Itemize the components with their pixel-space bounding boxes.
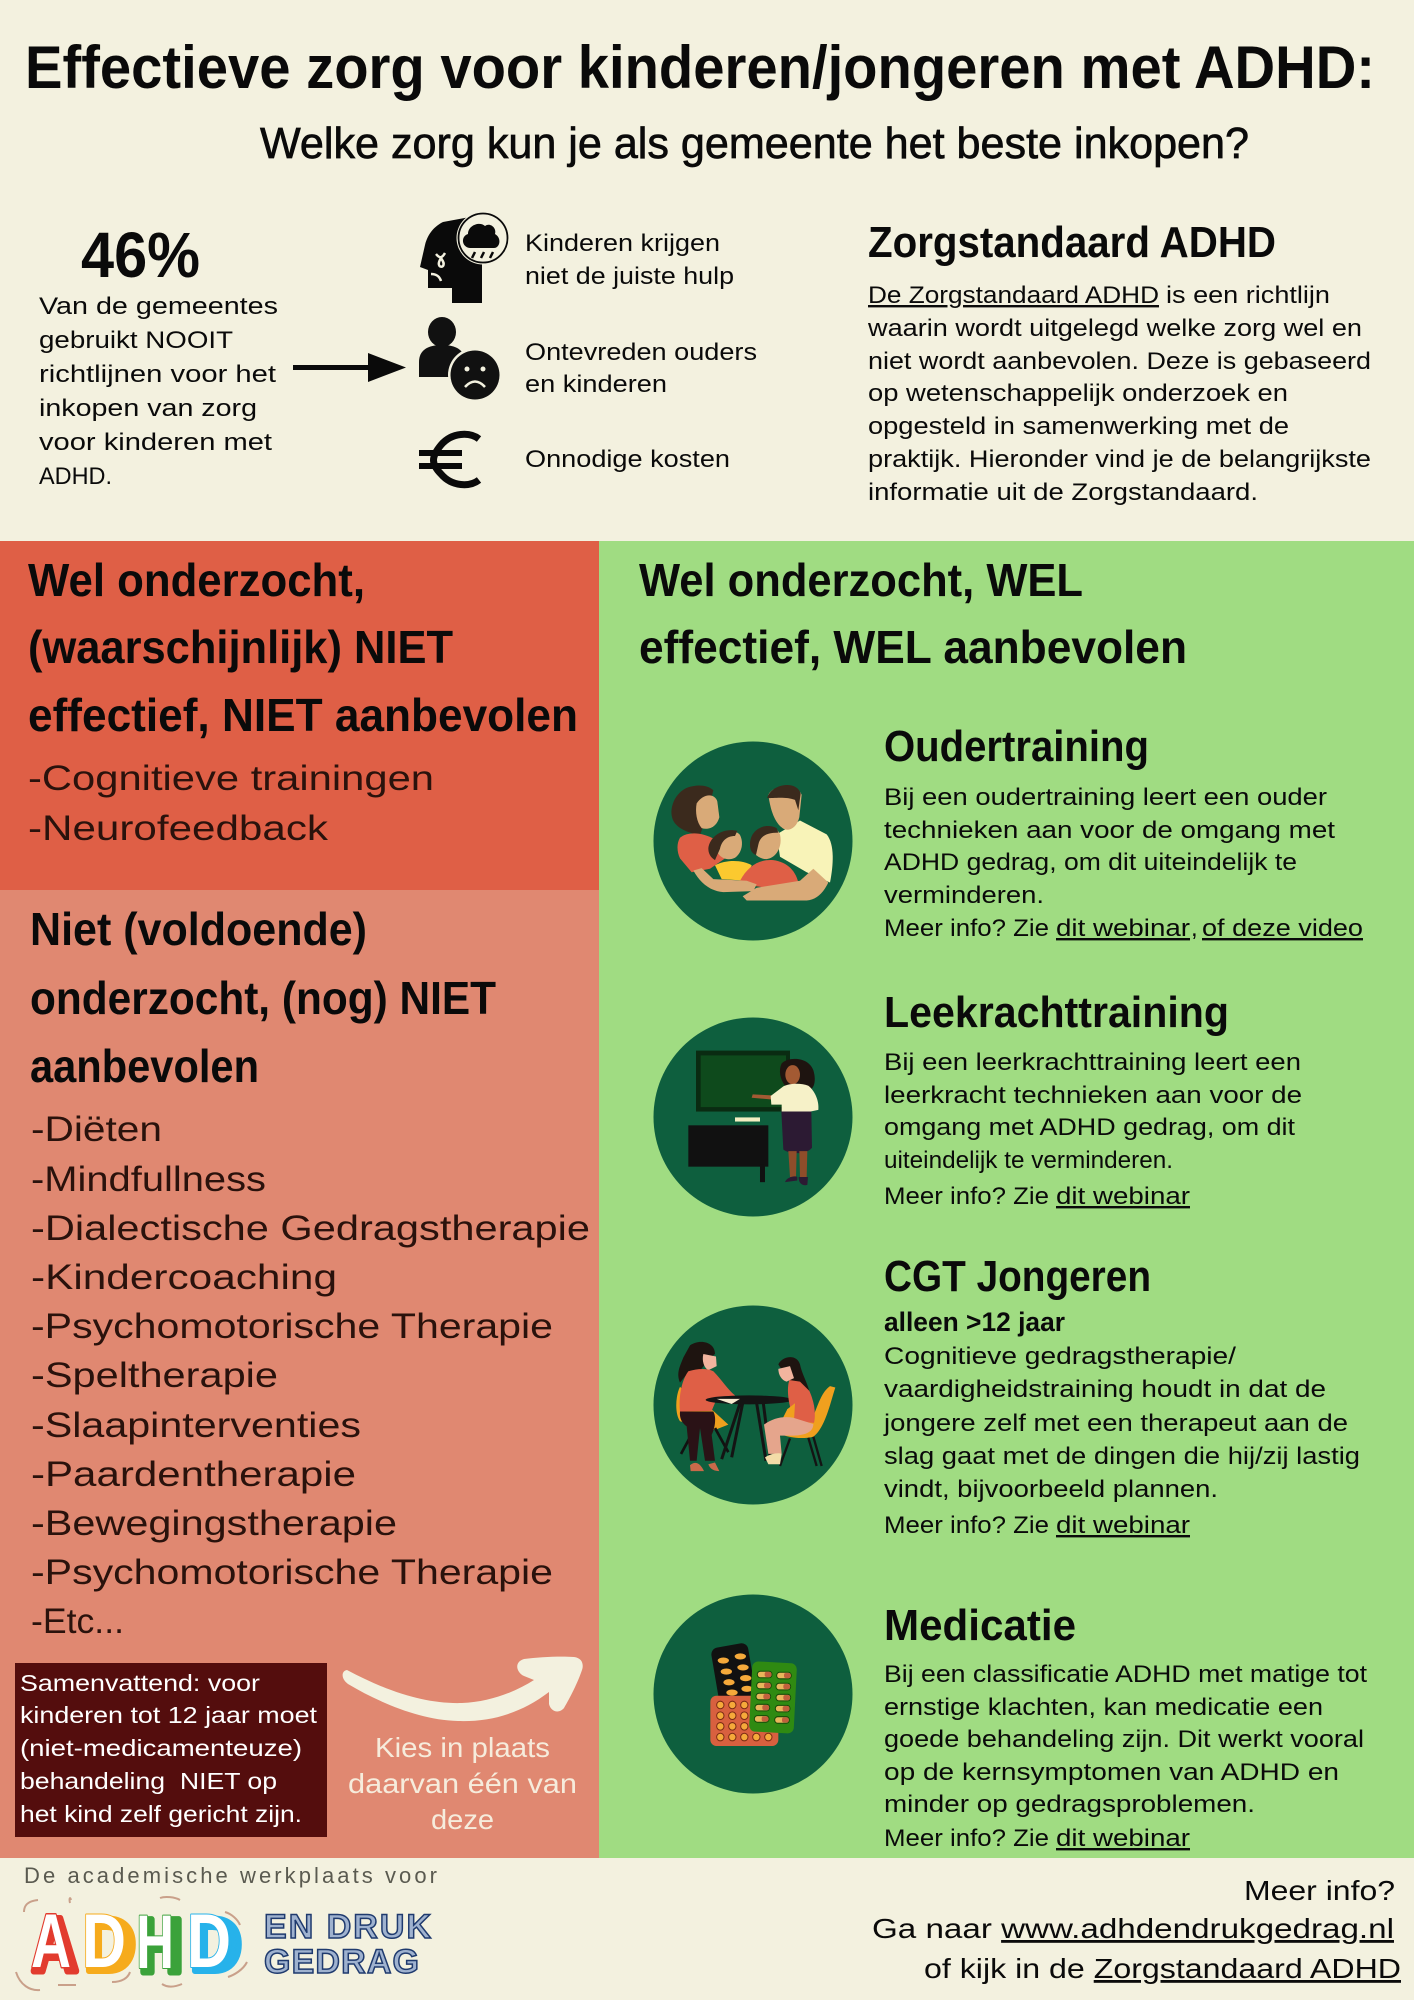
callout: choose instead: Kies in plaats [375, 1732, 550, 1763]
paragraph: waarin wordt uitgelegd welke zorg wel en [867, 315, 1362, 342]
description: Bij een classificatie ADHD met matige tot [884, 1661, 1367, 1688]
description: op de kernsymptomen van ADHD en [884, 1759, 1339, 1786]
description: of deze video [1202, 915, 1363, 942]
text block: Zorgstandaard ADHD [867, 218, 1371, 506]
statistic description: ADHD. [39, 463, 112, 490]
icon: therapist and adolescent at table [654, 1306, 852, 1504]
description: , [1191, 915, 1198, 942]
paragraph: is een richtlijn [1166, 282, 1330, 309]
consequences list [419, 212, 757, 485]
list of interventions [28, 759, 434, 848]
logo: ADHD letters: A [32, 1903, 78, 1988]
description [884, 1049, 1302, 1210]
label: dissatisfied: en kinderen [525, 371, 667, 398]
list of interventions: -Psychomotorische Therapie [31, 1307, 553, 1346]
description: goede behandeling zijn. Dit werkt vooral [884, 1726, 1364, 1753]
panel heading: effectief, NIET aanbevolen [28, 689, 578, 741]
paragraph [867, 282, 1371, 506]
paragraph: praktijk. Hieronder vind je de belangrijkste [868, 446, 1371, 473]
description [884, 1661, 1367, 1852]
panel heading: Wel onderzocht, WEL [639, 554, 1083, 606]
description: dit webinar [1056, 915, 1190, 942]
organisation tagline: De academische werkplaats voor [24, 1863, 437, 1888]
description: jongere zelf met een therapeut aan de [883, 1410, 1348, 1437]
description: vaardigheidstraining houdt in dat de [884, 1376, 1326, 1403]
icon: medication blister packs [654, 1594, 852, 1794]
description: vindt, bijvoorbeeld plannen. [884, 1476, 1218, 1503]
logo: en druk gedrag wordmark: EN DRUK [264, 1908, 431, 1946]
heading: Oudertraining [884, 722, 1149, 771]
callout: summary: kinderen tot 12 jaar moet [20, 1702, 318, 1728]
list of interventions: -Cognitieve trainingen [28, 759, 434, 798]
list of interventions: -Dialectische Gedragstherapie [31, 1209, 590, 1248]
description: minder op gedragsproblemen. [884, 1791, 1255, 1818]
callout: choose instead: daarvan één van [348, 1768, 577, 1799]
text block: medication [884, 1601, 1367, 1852]
list of interventions: -Mindfullness [31, 1160, 266, 1199]
panel heading: aanbevolen [30, 1040, 259, 1092]
list of interventions: -Slaapinterventies [31, 1406, 361, 1445]
text block: CBT for adolescents [883, 1252, 1360, 1539]
logo: ADHD letters: H [136, 1900, 174, 1985]
callout: summary [15, 1663, 327, 1837]
label: dissatisfied [525, 339, 757, 398]
panel heading: onderzocht, (nog) NIET [30, 972, 496, 1024]
arrow: curved towards recommended care [343, 1657, 583, 1721]
logo: ADHD letters: A [31, 1899, 71, 1984]
logo: ADHD letters: H [139, 1904, 183, 1989]
list of interventions: -Diëten [31, 1110, 162, 1149]
list of interventions: -Bewegingstherapie [31, 1504, 397, 1543]
heading: Zorgstandaard ADHD [868, 218, 1276, 267]
description: Meer info? Zie [884, 1512, 1049, 1539]
text block: parent training [884, 722, 1363, 942]
footer: more information: of kijk in de Zorgstandaard ADHD [924, 1953, 1401, 1984]
footer: more information: Ga naar www.adhdendrukgedrag.nl [872, 1913, 1394, 1944]
callout: summary: behandeling NIET op [20, 1768, 277, 1794]
footer: more information [872, 1875, 1401, 1984]
subtitle: Welke zorg kun je als gemeente het beste inkopen? [260, 119, 1249, 168]
callout: summary: (niet-medicamenteuze) [20, 1735, 302, 1761]
list of interventions: -Etc... [31, 1602, 124, 1641]
panel: researched, not effective [0, 541, 599, 890]
statistic description [39, 293, 278, 490]
description: omgang met ADHD gedrag, om dit [884, 1114, 1295, 1141]
list of interventions [31, 1110, 590, 1641]
statistic description: inkopen van zorg [39, 395, 257, 422]
paragraph: op wetenschappelijk onderzoek en [868, 380, 1288, 407]
description: verminderen. [884, 882, 1044, 909]
icon: person with sad face [419, 317, 502, 402]
icon: euro sign [419, 434, 479, 485]
panel heading [30, 903, 496, 1092]
statistic description: gebruikt NOOIT [39, 327, 233, 354]
description: Meer info? Zie [884, 915, 1049, 942]
paragraph: informatie uit de Zorgstandaard. [868, 479, 1258, 506]
panel heading: effectief, WEL aanbevolen [639, 621, 1187, 673]
panel heading: (waarschijnlijk) NIET [28, 621, 453, 673]
list of interventions: -Psychomotorische Therapie [31, 1553, 553, 1592]
description: uiteindelijk te verminderen. [884, 1147, 1173, 1174]
statistic description: voor kinderen met [39, 429, 272, 456]
footer: organisation [16, 1863, 437, 1990]
big number: 46% [81, 219, 200, 291]
statistic description: richtlijnen voor het [39, 361, 276, 388]
logo: en druk gedrag wordmark [264, 1908, 431, 1981]
description: Cognitieve gedragstherapie/ [884, 1343, 1236, 1370]
description: Bij een oudertraining leert een ouder [884, 784, 1327, 811]
description: dit webinar [1056, 1825, 1190, 1852]
label: wrong help [525, 230, 734, 290]
description [883, 1343, 1360, 1539]
label: wrong help: niet de juiste hulp [525, 263, 734, 290]
description: ernstige klachten, kan medicatie een [884, 1694, 1323, 1721]
arrow: statistic to consequences [293, 353, 406, 382]
heading: Leekrachttraining [884, 988, 1229, 1037]
icon: sad head with rain cloud [420, 212, 510, 303]
panel heading: Wel onderzocht, [28, 554, 365, 606]
heading: CGT Jongeren [884, 1252, 1151, 1301]
age note: alleen >12 jaar [884, 1307, 1065, 1337]
description [884, 784, 1363, 942]
logo: ADHD letters: D [84, 1903, 136, 1988]
list of interventions: -Neurofeedback [28, 809, 329, 848]
label: unnecessary costs: Onnodige kosten [525, 446, 730, 473]
description: dit webinar [1056, 1512, 1190, 1539]
panel heading: Niet (voldoende) [30, 903, 367, 955]
callout: summary: Samenvattend: voor [20, 1670, 260, 1696]
description: technieken aan voor de omgang met [884, 817, 1335, 844]
logo: ADHD letters: D [187, 1899, 231, 1984]
icon: family illustration [654, 742, 852, 940]
description: ADHD gedrag, om dit uiteindelijk te [884, 849, 1297, 876]
logo: ADHD letters [16, 1897, 247, 1990]
list of interventions: -Speltherapie [31, 1356, 278, 1395]
description: leerkracht technieken aan voor de [884, 1082, 1302, 1109]
description: dit webinar [1056, 1183, 1190, 1210]
paragraph: niet wordt aanbevolen. Deze is gebaseerd [868, 348, 1371, 375]
description: Bij een leerkrachttraining leert een [884, 1049, 1301, 1076]
description: Meer info? Zie [884, 1183, 1049, 1210]
logo: ADHD letters: D [190, 1903, 242, 1988]
callout: summary: het kind zelf gericht zijn. [20, 1801, 302, 1827]
paragraph: opgesteld in samenwerking met de [868, 413, 1289, 440]
callout: choose instead [348, 1732, 577, 1835]
statistic description: Van de gemeentes [39, 293, 278, 320]
text block: teacher training [884, 988, 1302, 1210]
panel heading [639, 554, 1187, 673]
heading: Medicatie [884, 1601, 1076, 1650]
label: dissatisfied: Ontevreden ouders [525, 339, 757, 366]
footer: more information: Meer info? [1244, 1875, 1395, 1906]
statistic: 46% of municipalities [39, 219, 278, 490]
callout: choose instead: deze [431, 1804, 494, 1835]
panel heading [28, 554, 578, 741]
logo: ADHD letters: D [82, 1899, 126, 1984]
list of interventions: -Paardentherapie [31, 1455, 356, 1494]
logo: en druk gedrag wordmark: GEDRAG [264, 1943, 419, 1981]
paragraph: De Zorgstandaard ADHD [868, 282, 1159, 309]
description: Meer info? Zie [884, 1825, 1049, 1852]
list of interventions: -Kindercoaching [31, 1258, 337, 1297]
panel: not sufficiently researched [0, 890, 599, 1858]
panel: recommended care [599, 541, 1414, 1858]
description: slag gaat met de dingen die hij/zij lastig [884, 1443, 1360, 1470]
icon: teacher at blackboard [654, 1018, 852, 1216]
label: wrong help: Kinderen krijgen [525, 230, 720, 257]
